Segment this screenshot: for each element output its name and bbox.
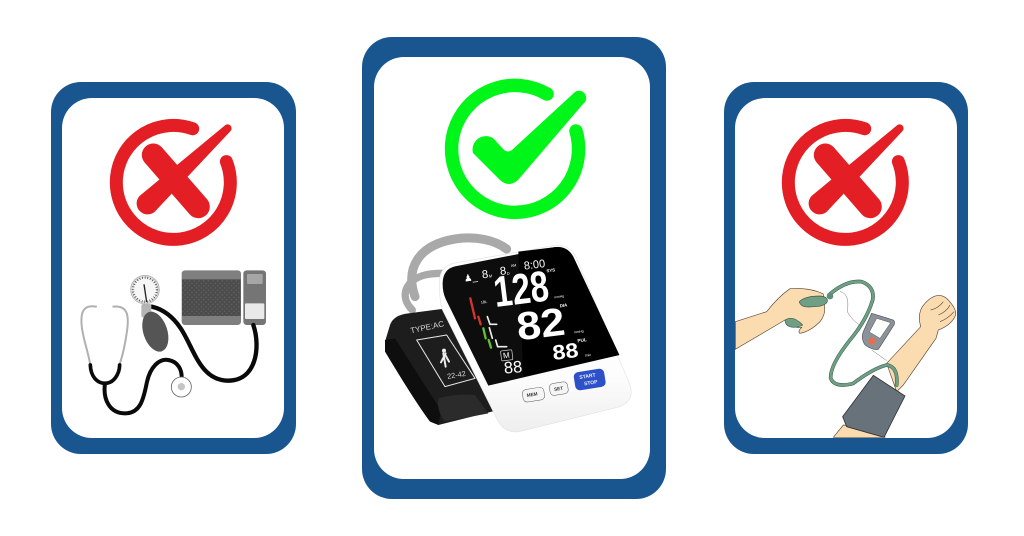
pressure gauge (131, 275, 159, 317)
arm cuff: TYPE:AC (410, 319, 445, 335)
buttons (522, 368, 606, 403)
monitor screen (443, 247, 619, 386)
cuff hose loops (405, 238, 507, 310)
START STOP button (573, 368, 606, 391)
risk indicator bars (470, 298, 507, 348)
screen readouts: M (502, 351, 510, 360)
inflation bulb (138, 308, 173, 355)
screen readouts: mmHg (554, 294, 564, 299)
screen readouts: 8 (499, 265, 507, 278)
SET button: SET (554, 386, 564, 392)
illustration: digital monitor with cuff (385, 238, 631, 432)
START STOP button: START (579, 373, 596, 381)
monitor body (439, 245, 631, 432)
device box (182, 270, 266, 325)
icon: green check in circle (452, 85, 586, 212)
screen readouts: D (507, 271, 510, 276)
thin cable (840, 292, 887, 361)
handheld meter (862, 313, 895, 350)
hand bulb (785, 296, 827, 327)
screen readouts: 8 (481, 269, 489, 281)
left arm and hand (735, 288, 825, 349)
screen readouts: 1BL (481, 300, 488, 305)
screen readouts: ♟_ (463, 272, 479, 284)
screen readouts: AM (511, 263, 517, 268)
panel: manual aneroid monitor (51, 82, 296, 454)
right arm and fist (887, 295, 956, 392)
memory reading: 88 (503, 357, 523, 378)
systolic reading: 128 (491, 263, 551, 317)
panel: wrist and manual arm measurement (724, 82, 968, 454)
illustration: sphygmomanometer and stethoscope (81, 270, 266, 413)
arm cuff (385, 309, 498, 425)
START STOP button: STOP (584, 379, 599, 387)
illustration: arm measurement with hand bulb (735, 281, 956, 437)
MEM button: MEM (526, 391, 538, 398)
chest piece (171, 377, 191, 397)
pulse reading: 88 (551, 339, 580, 365)
panel: digital upper arm monitor (362, 37, 666, 499)
finger lines (931, 302, 954, 322)
screen readouts: DIA (560, 302, 568, 308)
screen readouts: /min (585, 353, 592, 358)
arm cuff (843, 375, 905, 437)
lower arm (833, 425, 885, 437)
rubber tube (152, 307, 257, 381)
screen readouts: mmHg (574, 329, 584, 334)
icon: red cross in circle (788, 124, 904, 239)
screen readouts: PUL (577, 337, 587, 343)
diastolic reading: 82 (514, 300, 567, 349)
screen readouts (463, 258, 592, 378)
screen readouts: M (489, 273, 492, 279)
air tube (830, 281, 897, 385)
icon: red cross in circle (116, 124, 232, 239)
clock and date: 8:00 (523, 258, 546, 273)
stethoscope (81, 306, 182, 413)
arm cuff: 22-42 (446, 369, 466, 381)
screen readouts: SYS (546, 267, 555, 273)
